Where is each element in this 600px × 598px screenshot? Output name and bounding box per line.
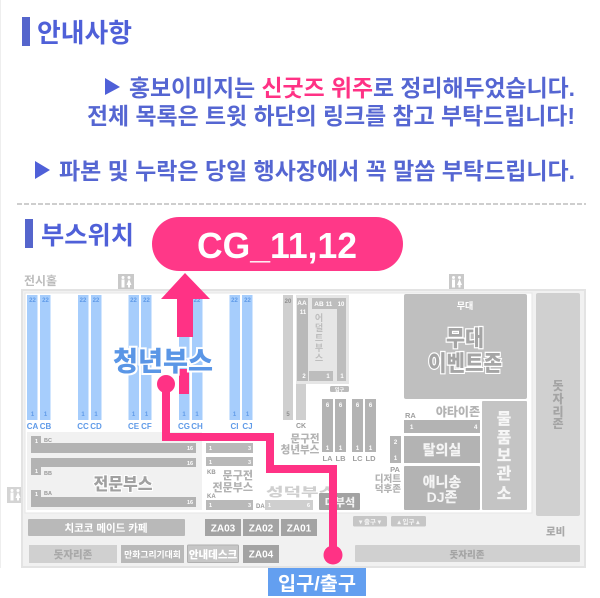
booth strips LA to LD: 1 [326,446,330,452]
booth numbers: 22 [29,298,36,304]
panel: 무대 이벤트존: 무대 [457,300,473,311]
booth numbers: 22 [194,298,201,304]
CK strip: CK [296,423,306,430]
panel: 전문부스: 16 [187,500,193,506]
CK strip: 20 [285,299,292,305]
booth strips LA to LD: LA [322,454,333,463]
panel: 어덜트부스: 1 [340,374,344,380]
panel: 탈의실: 탈의실 [423,442,461,458]
panel: ZA03 [205,519,241,536]
CK strip: 5 [286,412,290,418]
panel: 어덜트부스: 트 [315,333,323,343]
route line: entrance to booth [157,375,342,564]
sign: 입구 [391,516,426,526]
CK strip [283,295,306,430]
panel: 문구전 전문부스: 3 [248,460,251,466]
panel: 성덕부스: DA [256,504,265,510]
booth numbers: 22 [130,298,137,304]
panel: 물품보관소: 품 [497,429,512,447]
booth numbers: 1 [246,412,250,418]
label: 문구전 청년부스: 문구전 [291,432,319,445]
panel: 물품보관소 [482,401,527,510]
booth PA: 1 [394,456,398,462]
panel: 전문부스: BC [44,438,52,444]
sign: 출구: ▾ 출구 ▾ [358,517,382,526]
panel: 어덜트부스: 1 [326,374,330,380]
badge: CG_11,12: CG_11,12 [197,225,357,266]
booth numbers: 1 [145,412,149,418]
panel: 돗자리존 right: 돗 [552,379,564,393]
panel: 어덜트부스: 2 [302,374,306,380]
booth numbers: 1 [182,412,186,418]
panel: 야타이존: RA [405,411,416,420]
booth numbers: 22 [143,298,150,304]
panel: 돗자리존 bottom: 돗자리존 [450,549,485,561]
panel: 문구전 전문부스 [206,437,253,510]
panel: ZA02 [243,519,279,536]
booth numbers: 1 [31,412,35,418]
panel: 전문부스 [27,432,202,510]
panel: 야타이존 [404,405,480,433]
panel: 돗자리존 right: 존 [552,417,564,431]
panel: 문구전 전문부스: 3 [248,503,251,509]
label: 문구전 청년부스 [281,432,320,456]
booth strips LA to LD: 1 [356,446,360,452]
badge: CG_11,12 [152,217,403,271]
label: 입구/출구 [268,568,366,596]
booth numbers: 1 [233,412,237,418]
panel: ZA01: ZA01 [287,524,312,534]
panel: 전문부스: 1 [35,469,38,475]
booth row labels: CI [230,422,238,431]
panel: 돗자리존 right: 자 [552,391,564,406]
panel: ZA04 [243,545,279,563]
notice line 1: 홍보이미지는 신굿즈 위주로 정리해두었습니다. [129,75,575,101]
panel: ZA04: ZA04 [249,550,274,560]
panel: 안내데스크 [188,545,238,562]
booth strips LA to LD [322,399,376,463]
blue booth strips [27,295,252,420]
panel: 안내데스크: 안내데스크 [189,548,237,561]
panel: 무대 이벤트존 [404,294,527,399]
panel: 돗자리존 bottom [355,545,580,562]
panel: 성덕부스: 성덕부스 [266,484,336,499]
panel: 어덜트부스: 10 [338,302,345,308]
panel: 문구전 전문부스: KB [207,470,216,476]
booth numbers [29,298,251,418]
booth strips LA to LD: LC [352,454,363,463]
booth numbers: 22 [80,298,87,304]
panel: 만화그리기대회 [121,545,184,563]
heading: 부스위치: 부스위치 [41,222,134,250]
panel: 어덜트부스: AB [314,301,324,308]
panel: 애니송 DJ존: 애니송 [423,474,461,490]
panel: 애니송 DJ존: DJ존 [427,489,458,505]
label: 로비: 로비 [546,525,565,538]
panel: 문구전 전문부스: 1 [209,460,212,466]
panel: 물품보관소: 물 [497,411,512,428]
panel: 어덜트부스: 11 [326,302,333,308]
panel: 문구전 전문부스: 1 [209,446,212,452]
label: 청년부스: 청년부스 [113,347,213,377]
panel: 치코코 메이드 카페: 치코코 메이드 카페 [64,522,148,534]
booth PA: PA [390,465,401,474]
panel: 탈의실 [404,436,480,463]
arrow: short stem below label [179,369,189,394]
booth strips LA to LD: LD [366,454,376,463]
booth row labels: CE [128,422,140,431]
panel: 성덕부스: 6 [307,503,310,509]
panel: 전문부스: 16 [187,446,193,452]
floor map [22,290,585,567]
panel: ZA01 [281,519,317,536]
panel: 돗자리존 right [536,293,580,516]
notice line 2: 전체 목록은 트윗 하단의 링크를 참고 부탁드립니다! [87,103,575,129]
booth row labels: CH [191,422,203,431]
booth row labels: CF [141,422,152,431]
panel: 무대 이벤트존: 무대 [446,326,484,351]
panel: ZA03: ZA03 [211,524,236,534]
booth numbers: 1 [81,412,85,418]
booth row labels: CD [90,422,102,431]
panel: 문구전 전문부스: 1 [209,503,212,509]
booth row labels: CJ [242,422,253,431]
panel: 대부석: 대부석 [325,495,355,509]
booth PA: 덕후존 [375,483,401,495]
panel: 전문부스: 16 [187,461,193,467]
booth numbers: 1 [44,412,48,418]
booth numbers: 22 [244,298,251,304]
booth strips LA to LD: LB [336,454,346,463]
panel: 무대 이벤트존: 이벤트존 [428,351,502,376]
panel: 물품보관소: 소 [497,485,512,503]
heading: 안내사항: 안내사항 [37,18,132,48]
booth PA [375,436,401,495]
panel: 어덜트부스: 덜 [315,322,323,333]
booth strips LA to LD: 6 [369,403,373,409]
panel: 만화그리기대회: 만화그리기대회 [124,548,181,560]
panel: 전문부스: BA [44,491,52,497]
booth strips LA to LD: 6 [356,403,360,409]
panel: 전문부스: BB [44,471,52,477]
panel: 문구전 전문부스: 전문부스 [213,480,253,494]
booth PA: 디저트 [375,473,401,485]
notice line 3: 파본 및 누락은 당일 행사장에서 꼭 말씀 부탁드립니다. [59,158,575,184]
booth row labels [27,422,253,431]
panel: 어덜트부스 [296,295,349,394]
booth numbers: 1 [195,412,199,418]
booth strips LA to LD: 6 [326,403,330,409]
label: 문구전 청년부스: 청년부스 [281,443,320,456]
panel: 어덜트부스: AA [297,300,307,307]
panel: 어덜트부스: 11 [300,310,307,316]
booth numbers: 22 [181,298,188,304]
icon: restroom top left [118,274,134,290]
booth numbers: 1 [94,412,98,418]
panel: 치코코 메이드 카페 [28,519,185,536]
panel: 어덜트부스: 부 [315,343,323,353]
panel: 야타이존: 야타이존 [436,405,480,419]
panel: 야타이존: 1 [410,425,414,431]
hall outline [22,290,585,567]
booth row labels: CG [178,422,190,431]
panel: 물품보관소: 관 [497,465,512,483]
panel: 돗자리존 left: 돗자리존 [54,548,93,561]
panel: 물품보관소: 보 [497,447,512,465]
panel: 문구전 전문부스: KA [207,494,216,500]
panel: 돗자리존 left [29,545,117,563]
sign: 출구 [353,516,387,526]
panel: 어덜트부스: 어 [315,313,323,323]
sign: 입구: ▴ 입구 ▴ [396,517,420,526]
booth numbers: 22 [93,298,100,304]
booth row labels: CC [77,422,89,431]
arrow: up to booth badge [161,273,210,337]
panel: 야타이존: 4 [474,425,478,431]
panel: 성덕부스: 1 [268,503,271,509]
panel: 대부석 [319,493,360,510]
label: 입구/출구: 입구/출구 [278,573,356,595]
icon: restroom left [7,487,23,503]
panel: 문구전 전문부스: 3 [248,446,251,452]
panel: 문구전 전문부스: 문구전 [223,468,253,482]
panel: 전문부스: 전문부스 [94,475,153,494]
icon: restroom top right [449,274,464,290]
notice text block [35,75,575,184]
booth strips LA to LD: 1 [369,446,373,452]
booth strips LA to LD: 6 [339,403,343,409]
booth row labels: CA [27,422,38,431]
booth numbers: 22 [231,298,238,304]
panel: 전문부스: 1 [35,492,38,498]
panel: 전문부스: 1 [35,439,38,445]
label: 전시홀: 전시홀 [24,273,57,288]
panel: 어덜트부스: 스 [315,353,323,363]
panel: ZA02: ZA02 [249,524,274,534]
panel: 문구전 전문부스: KC [207,437,216,443]
booth strips LA to LD: 1 [339,446,343,452]
booth numbers: 1 [132,412,136,418]
panel: 어덜트부스: 입구 [335,386,344,394]
booth PA: 2 [394,440,398,446]
panel: 애니송 DJ존 [404,466,480,510]
booth row labels: CB [40,422,51,431]
panel: 돗자리존 right: 리 [552,404,564,419]
panel: 성덕부스 [256,484,336,510]
booth numbers: 22 [42,298,49,304]
